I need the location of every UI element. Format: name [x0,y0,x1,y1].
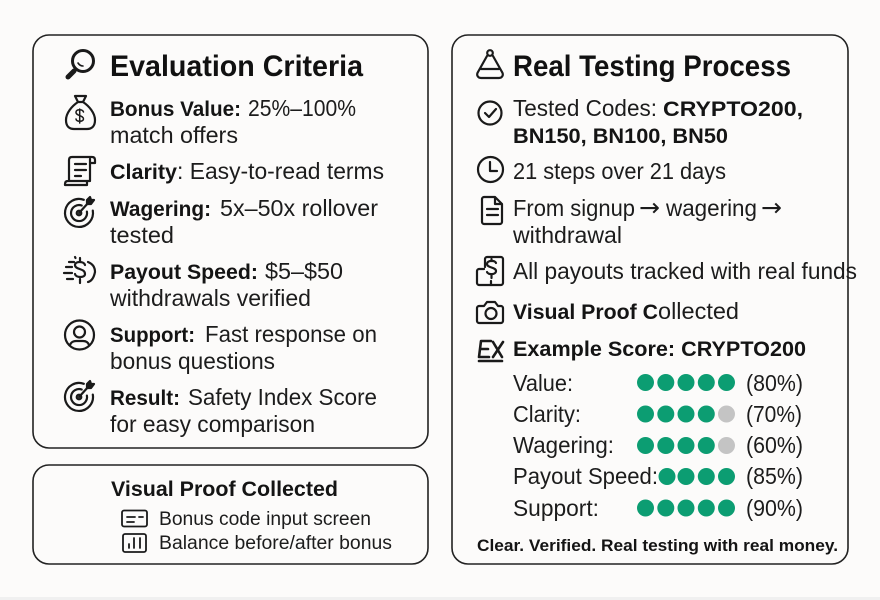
score row: payout speed: Payout Speed: [513,463,658,489]
text: tested codes: BN150, BN100, BN50 [513,124,728,148]
score row: value: Value: [513,370,573,396]
text: example score: Example Score: CRYPTO200 [513,337,806,361]
text: wagering: tested [110,222,174,248]
text: payout speed [109,258,343,311]
text: clarity: : Easy-to-read terms [177,158,384,184]
text: result: Safety Index Score [188,384,377,410]
text: bonus code input screen: Bonus code input screen [159,509,371,530]
score row: support: Support: [513,495,599,521]
icon: target [65,197,94,227]
text: signup to withdrawal [512,193,782,248]
icon: payout receipt [477,257,503,285]
score row: value: (80%) [746,370,803,396]
text: payout speed: withdrawals verified [109,285,311,311]
text: wagering: Wagering: [110,197,211,221]
text: bonus value: Bonus Value: [110,97,241,121]
score row: clarity [513,401,802,427]
text: bonus value: match offers [110,122,238,148]
icon: example EX [479,341,503,361]
text: payout speed: $5–$50 [265,258,343,284]
text: wagering: 5x–50x rollover [220,195,378,221]
text: payout speed: Payout Speed: [110,260,258,284]
text: bonus value: 25%–100% [248,95,356,121]
icon: input screen [122,510,147,526]
text: visual proof collected: Visual Proof C [513,300,658,324]
text: tested codes: Tested Codes: [513,95,657,121]
score row: wagering: Wagering: [513,432,614,458]
score row: value [513,370,803,396]
score row: support: (90%) [746,495,803,521]
text: all payouts: All payouts tracked with real funds [513,258,857,284]
text: signup to withdrawal: withdrawal [512,222,622,248]
score row: payout speed [513,463,803,489]
icon: bar chart [123,534,146,552]
text: visual proof collected: ollected [658,298,739,324]
score row: payout speed: (85%) [746,463,803,489]
icon: result target [65,381,94,411]
icon: clock [478,157,503,182]
icon: camera [477,302,503,323]
text: visual proof collected [513,298,739,324]
score row: support [513,495,803,521]
icon: flask [477,50,503,78]
score row: clarity: Clarity: [513,401,581,427]
text: support: Support: [110,323,195,347]
panel: real testing process [452,35,857,564]
text: signup to withdrawal: wagering [665,195,757,221]
icon: magnifying glass [68,50,94,77]
text: tested codes [513,95,803,148]
score row: wagering [513,432,803,458]
icon: fast payout [64,257,95,283]
score row: clarity: (70%) [746,401,802,427]
footer tagline: Clear. Verified. Real testing with real money. [477,536,838,555]
heading: real testing process: Real Testing Process [513,50,791,83]
text: signup to withdrawal: From signup [513,195,635,221]
icon: money bag [66,96,95,129]
panel: visual proof collected [33,465,428,564]
icon: document scroll [65,157,95,185]
text: wagering [110,195,378,248]
text: result: for easy comparison [110,411,315,437]
text: bonus value [110,95,356,148]
text: tested codes: CRYPTO200, [663,97,803,121]
text: support: bonus questions [110,348,275,374]
text: clarity: Clarity [110,160,177,184]
text: support: Fast response on [205,321,377,347]
icon: document [482,197,502,224]
heading: evaluation criteria: Evaluation Criteria [110,50,363,83]
text: result [110,384,377,437]
text: signup to withdrawal: → [639,193,660,222]
text: support [110,321,377,374]
icon: user support [65,320,94,350]
text: result: Result: [110,386,180,410]
icon: check circle [478,102,502,124]
text: 21 steps: 21 steps over 21 days [513,158,726,184]
text: signup to withdrawal: → [761,193,782,222]
score row: wagering: (60%) [746,432,803,458]
text: balance before/after bonus: Balance before/after bonus [159,533,392,554]
heading: visual proof collected: Visual Proof Collected [111,477,338,501]
panel: evaluation criteria [33,35,428,448]
